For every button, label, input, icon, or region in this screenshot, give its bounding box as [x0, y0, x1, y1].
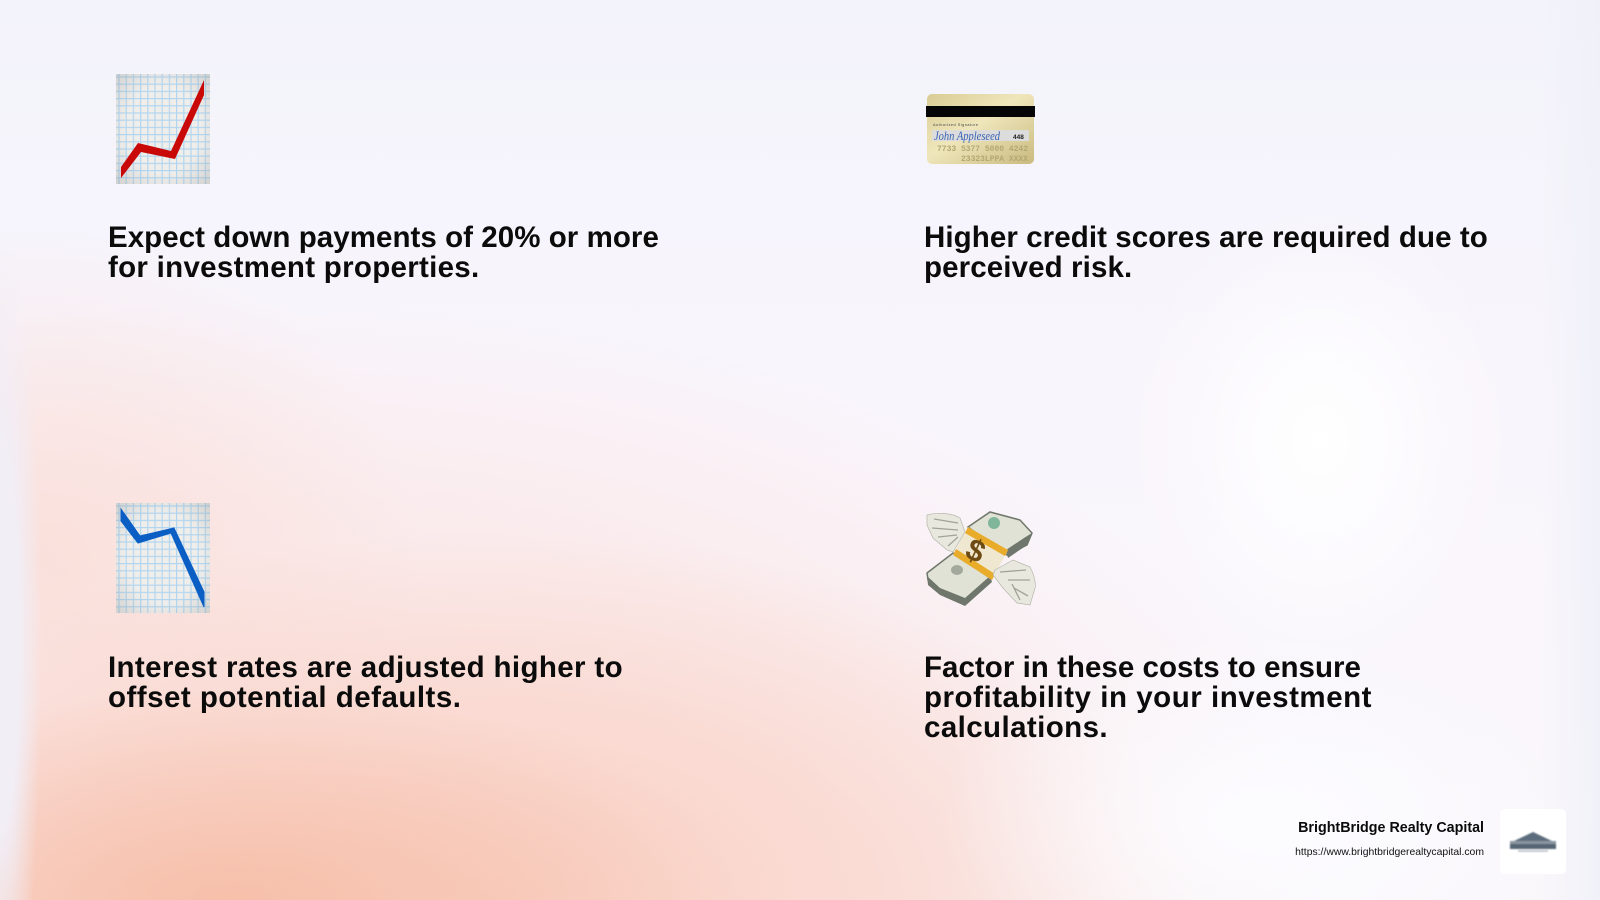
- icon: credit card back: 448: [1013, 134, 1024, 141]
- text: interest rates: [108, 651, 623, 714]
- icon: credit card back: Authorized Signature: [933, 123, 978, 127]
- right wing: [993, 560, 1035, 605]
- logo tile: [1509, 809, 1566, 874]
- text: down payments: [108, 221, 659, 284]
- text: credit scores: [924, 221, 1488, 284]
- paper band with dollar sign: $: [960, 531, 991, 570]
- text: factor costs: calculations.: [924, 711, 1108, 744]
- left wing: [927, 513, 965, 552]
- text: down payments: for investment properties.: [108, 251, 479, 284]
- text: factor costs: Factor in these costs to ensure: [924, 651, 1361, 684]
- icon: credit card back: 23323LPPA XXXX: [961, 155, 1028, 164]
- icon: money with wings: [926, 511, 1036, 606]
- icon: credit card back: [926, 94, 1035, 164]
- text: factor costs: profitability in your investment: [924, 681, 1372, 714]
- text: down payments: Expect down payments of 20% or more: [108, 221, 659, 254]
- text: credit scores: Higher credit scores are required due to: [924, 221, 1488, 254]
- upper bills stack: [968, 512, 1032, 558]
- icon: credit card back: 7733 5377 5000 4242: [937, 145, 1028, 154]
- icon: chart decreasing: [116, 503, 210, 613]
- text: interest rates: Interest rates are adjusted higher to: [108, 651, 623, 684]
- text: interest rates: offset potential defaults.: [108, 681, 461, 714]
- text: credit scores: perceived risk.: [924, 251, 1132, 284]
- text: factor costs: [924, 651, 1372, 744]
- icon: credit card back: John Appleseed: [934, 128, 1000, 143]
- brand name: BrightBridge Realty Capital: [1298, 820, 1484, 836]
- brand url: https://www.brightbridgerealtycapital.com: [1295, 847, 1484, 858]
- lower bills stack: [927, 553, 992, 606]
- icon: chart increasing: [116, 74, 210, 184]
